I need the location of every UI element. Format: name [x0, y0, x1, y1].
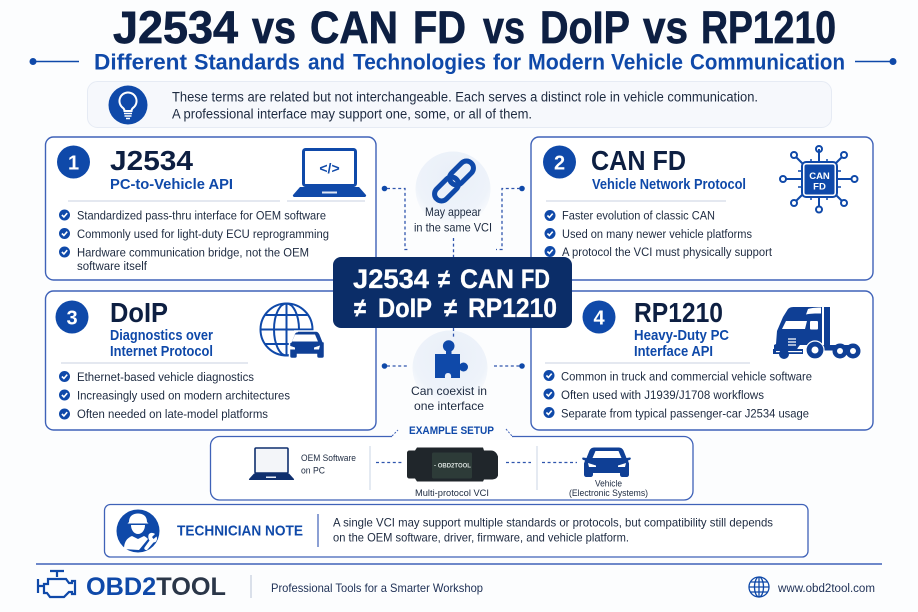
title: vs — [643, 2, 688, 53]
central banner — [333, 257, 572, 328]
subheading: Vehicle Network Protocol — [592, 176, 746, 193]
icon: CAN FD chip: FD — [813, 182, 826, 192]
bullet list: Common in truck and commercial vehicle software — [561, 370, 812, 384]
subtitle — [30, 50, 896, 74]
bullet list: Increasingly used on modern architectures — [77, 388, 290, 402]
website: www.obd2tool.com — [777, 583, 875, 595]
subtitle: and — [308, 50, 345, 74]
heading: CAN FD: CAN FD — [591, 145, 686, 176]
icon: chain link — [432, 158, 476, 204]
subtitle: Different — [94, 50, 188, 74]
subtitle: Standards — [194, 50, 300, 74]
badge 4 — [582, 300, 616, 334]
panel: J2534 — [46, 137, 376, 280]
bullet list: A protocol the VCI must physically support — [562, 245, 773, 259]
central banner: CAN — [460, 264, 514, 294]
label: VCI: Multi-protocol VCI — [415, 488, 489, 499]
label: OEM software: on PC — [301, 466, 325, 476]
note text: A single VCI may support multiple standards or protocols, but compatibility still depends — [333, 516, 773, 530]
central banner: ≠ — [354, 293, 366, 323]
tagline: Professional Tools for a Smarter Workshop — [271, 581, 483, 595]
icon: CAN FD chip: CAN — [809, 171, 830, 182]
bullet list: Commonly used for light-duty ECU reprogramming — [77, 227, 329, 241]
subheading: PC-to-Vehicle API — [110, 176, 233, 193]
label: OEM software: OEM Software — [301, 453, 356, 464]
badge 2 — [543, 146, 576, 178]
device: multi-protocol VCI: - OBD2TOOL — [434, 464, 471, 470]
callout: can coexist in one interface: Can coexist in — [411, 385, 487, 398]
intro text: A professional interface may support one, some, or all of them. — [172, 106, 532, 122]
subheading: Internet Protocol — [110, 343, 213, 360]
bullet list — [59, 208, 329, 273]
callout: may appear in the same VCI: May appear — [425, 206, 481, 219]
icon: globe — [749, 577, 769, 597]
intro text: These terms are related but not interchangeable. Each serves a distinct role in vehicle communication. — [172, 90, 758, 104]
intro text — [172, 90, 758, 122]
icon: check engine — [38, 571, 75, 597]
heading: technician note: TECHNICIAN NOTE — [177, 522, 303, 540]
title: vs — [483, 2, 525, 53]
subtitle: for — [493, 50, 521, 74]
icon: puzzle piece — [435, 340, 468, 378]
central banner: RP1210 — [468, 293, 557, 323]
bullet list: Ethernet-based vehicle diagnostics — [77, 370, 254, 384]
badge 1: 1 — [68, 152, 79, 174]
logo wordmark: OBD2TOOL — [86, 573, 226, 601]
subheading: Heavy-Duty PC — [634, 327, 729, 344]
icon: laptop with code — [293, 150, 366, 197]
subheading: Interface API — [634, 343, 713, 360]
subtitle: Technologies — [353, 50, 486, 74]
heading: DoIP: DoIP — [110, 297, 168, 328]
bullet list — [544, 208, 773, 259]
title: FD — [413, 2, 466, 53]
panel: DoIP — [46, 291, 376, 430]
bullet list: software itself — [77, 259, 148, 273]
note text — [333, 516, 773, 544]
icon: light bulb — [108, 86, 148, 124]
badge 4: 4 — [593, 308, 605, 330]
subtitle: Modern — [528, 50, 605, 74]
badge 3: 3 — [66, 308, 78, 330]
note text: on the OEM software, driver, firmware, and vehicle platform. — [333, 532, 629, 544]
bullet list: Faster evolution of classic CAN — [562, 208, 715, 222]
subheading — [110, 327, 213, 360]
central banner: ≠ — [438, 264, 450, 294]
icon: car — [582, 448, 631, 477]
central banner: J2534 — [353, 264, 429, 294]
heading: J2534: J2534 — [110, 145, 193, 176]
panel: technician note — [104, 504, 808, 557]
central banner: FD — [521, 264, 550, 294]
icon: laptop — [249, 448, 294, 480]
callout: may appear in the same VCI — [382, 150, 525, 258]
intro callout — [88, 82, 832, 128]
label: OEM software — [301, 453, 356, 476]
bullet list: Often used with J1939/J1708 workflows — [561, 388, 764, 402]
central banner: DoIP — [378, 293, 432, 323]
badge 2: 2 — [554, 152, 565, 174]
icon: truck — [773, 307, 860, 359]
icon: globe and car — [260, 304, 324, 358]
callout: may appear in the same VCI: in the same VCI — [414, 222, 492, 234]
title — [113, 2, 836, 53]
callout: can coexist in one interface: one interface — [414, 400, 484, 413]
footer — [38, 571, 875, 601]
title: vs — [252, 2, 296, 53]
subheading — [634, 327, 729, 360]
title: J2534 — [113, 2, 238, 53]
central banner: ≠ — [444, 293, 457, 323]
subtitle: Communication — [690, 50, 845, 74]
label: vehicle — [569, 478, 648, 499]
callout: can coexist in one interface — [382, 328, 525, 413]
bullet list: Hardware communication bridge, not the OEM — [77, 246, 309, 260]
subheading: Diagnostics over — [110, 327, 213, 344]
badge 1 — [57, 146, 90, 178]
subtitle: Vehicle — [611, 50, 683, 74]
badge 3 — [56, 300, 88, 334]
bullet list — [544, 370, 812, 420]
panel: CAN FD — [531, 137, 873, 280]
heading: example setup: EXAMPLE SETUP — [409, 425, 494, 437]
panel: RP1210 — [531, 291, 873, 430]
title: RP1210 — [701, 2, 836, 53]
panel: example setup — [210, 425, 693, 500]
bullet list — [59, 370, 290, 421]
bullet list: Standardized pass-thru interface for OEM software — [77, 208, 326, 222]
label: vehicle: Vehicle — [595, 478, 622, 490]
bullet list: Separate from typical passenger-car J2534 usage — [561, 406, 809, 420]
bullet list: Often needed on late-model platforms — [77, 407, 268, 421]
title: DoIP — [540, 2, 630, 53]
title: CAN — [310, 2, 398, 53]
icon: CAN FD chip — [780, 146, 858, 212]
label: vehicle: (Electronic Systems) — [569, 488, 648, 499]
heading: RP1210: RP1210 — [634, 297, 723, 328]
bullet list: Used on many newer vehicle platforms — [562, 227, 752, 241]
device: multi-protocol VCI — [407, 448, 498, 482]
icon: laptop with code: </> — [319, 160, 340, 176]
icon: technician — [116, 510, 160, 552]
